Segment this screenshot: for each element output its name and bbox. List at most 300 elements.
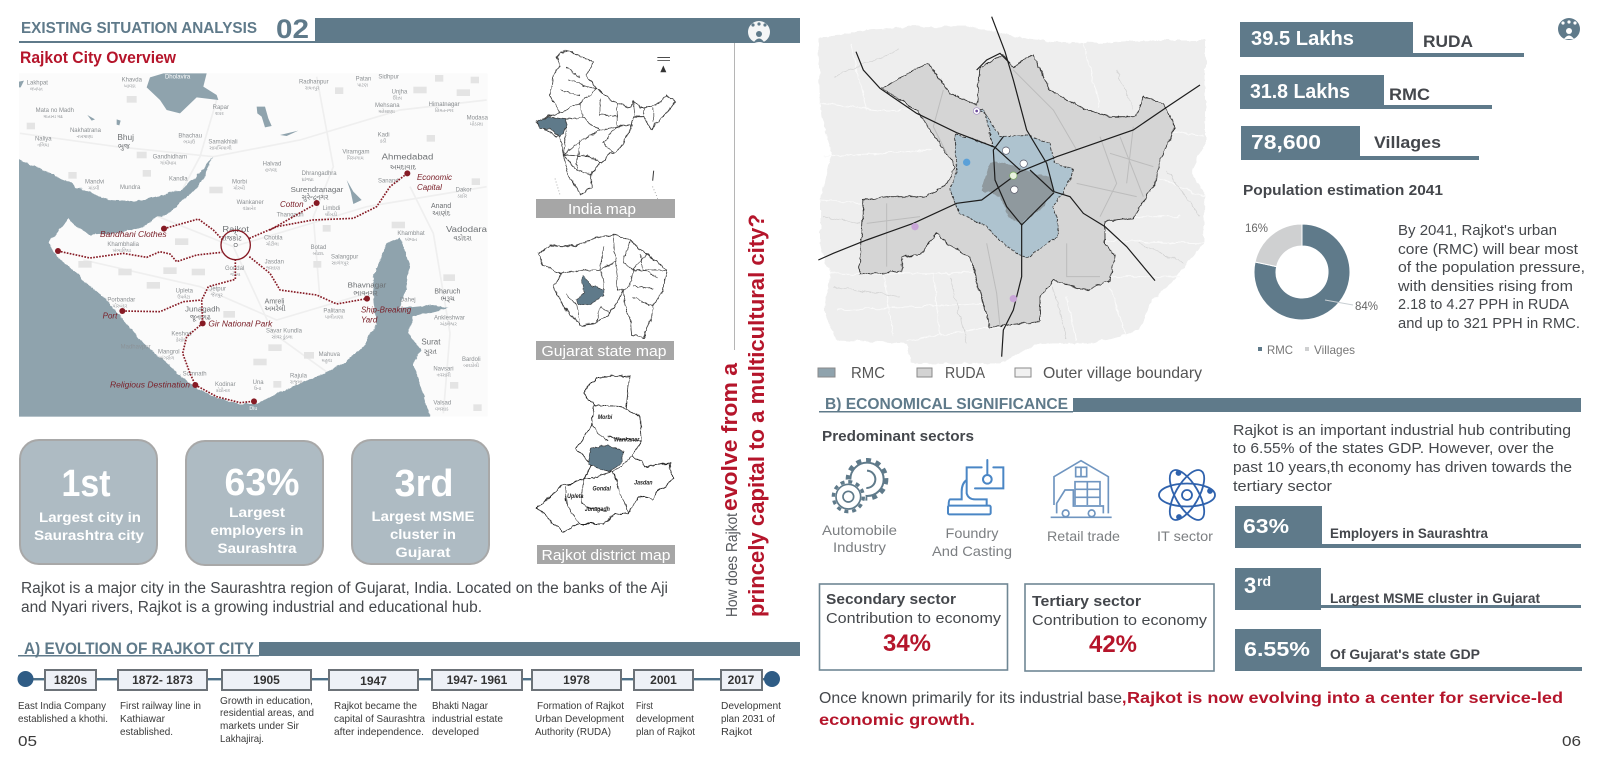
city labels: Kodinar xyxy=(215,382,236,388)
city labels: Somnath xyxy=(183,371,207,377)
map: RMC, RUDA and outer village boundary xyxy=(818,17,1205,363)
city labels: Dakor xyxy=(456,187,472,193)
city labels: નખત્રાણા xyxy=(77,134,93,140)
city labels xyxy=(27,74,489,413)
icon: warehouse truck xyxy=(1051,461,1112,517)
locator map: Gujarat xyxy=(538,234,667,337)
locator map: India xyxy=(537,51,675,200)
city labels: કડી xyxy=(380,137,387,144)
section heading: economical significance xyxy=(819,396,1581,413)
city labels: Rajkot xyxy=(222,225,250,234)
page 06: population and economy xyxy=(818,17,1585,750)
locator map: Rajkot district: Junagadh xyxy=(585,507,610,513)
city labels: ઉપલેટા xyxy=(177,294,191,301)
city labels: Khambhalia xyxy=(107,242,140,248)
city labels: Limbdi xyxy=(323,206,340,212)
callout: tertiary sector: 42% xyxy=(1089,631,1137,658)
milestone 1905: 1905 xyxy=(253,673,280,687)
stat row: 6.55% state GDP: Of Gujarat's state GDP xyxy=(1330,646,1480,662)
vertical question text xyxy=(717,214,769,617)
city labels: બોટાદ xyxy=(313,251,324,257)
sector: retail trade xyxy=(1047,461,1120,544)
route annotations: Religious Destination xyxy=(110,381,191,390)
city labels: Halvad xyxy=(263,161,281,167)
city labels: ખંભાત xyxy=(405,237,417,243)
city labels: Bardoli xyxy=(462,357,481,363)
sector: automobile industry: Industry xyxy=(833,539,886,555)
milestone 1947: 1947 xyxy=(360,674,387,688)
stat row: 3rd MSME cluster: Largest MSME cluster in Gujarat xyxy=(1330,590,1540,606)
city labels: Mangrol xyxy=(158,349,180,355)
stat bar: villages population: Villages xyxy=(1374,133,1441,152)
locator map: Rajkot district: Morbi xyxy=(598,415,613,421)
city labels: મહુવા xyxy=(322,358,333,364)
map legend: Outer village boundary xyxy=(1043,365,1202,382)
city labels: Surat xyxy=(421,338,441,347)
city labels: સાળંગપુર xyxy=(332,261,349,267)
city labels: Mandvi xyxy=(85,179,104,185)
city labels: Sanand xyxy=(378,179,399,185)
conclusion statement xyxy=(819,690,1563,729)
milestone 1905: markets under Sir xyxy=(220,720,299,732)
locator map: Rajkot district xyxy=(537,375,673,532)
stat bar: RUDA population: RUDA xyxy=(1423,32,1473,51)
city labels: Vadodara xyxy=(446,225,488,234)
stat row: 63% employers xyxy=(1235,506,1581,548)
stat bar: RMC population: 31.8 Lakhs xyxy=(1250,81,1350,103)
stat card: 1st: Largest city in xyxy=(39,510,141,525)
route annotations: Economic xyxy=(417,173,452,182)
city labels: Dhrangadhra xyxy=(302,171,337,177)
city labels: Ankleshwar xyxy=(434,315,465,321)
city labels: Himatnagar xyxy=(429,102,460,108)
sector: IT sector: IT sector xyxy=(1157,528,1213,544)
population paragraph: By 2041, Rajkot's urban xyxy=(1398,223,1557,239)
page header: 02 xyxy=(276,14,309,44)
city labels: Jasdan xyxy=(265,259,284,265)
milestone 1905 xyxy=(220,670,314,745)
stat bar: RUDA population xyxy=(1240,22,1524,57)
milestone 2001 xyxy=(634,670,695,738)
caption: India map: India map xyxy=(568,201,636,218)
city labels: સુરેન્દ્રનગર xyxy=(302,191,329,201)
city labels: રાધનપુર xyxy=(305,85,320,91)
sector: IT sector xyxy=(1157,465,1215,544)
conclusion statement: , xyxy=(1122,690,1126,707)
city labels: ખાવડા xyxy=(124,84,136,90)
city labels: જેતપુર xyxy=(211,292,223,299)
heading: population estimation 2041: Population estimation 2041 xyxy=(1243,182,1443,199)
locator map: Rajkot district: Upleta xyxy=(567,494,584,500)
city labels: Lakhpat xyxy=(27,81,48,87)
conclusion statement: economic growth. xyxy=(819,712,975,729)
route annotations: Capital xyxy=(417,183,442,192)
city labels: Khambhat xyxy=(397,231,425,237)
city labels: Upleta xyxy=(176,289,194,295)
stat card: 63% xyxy=(186,441,323,565)
city labels: ઉના xyxy=(254,385,262,392)
city labels: Bhavnagar xyxy=(348,283,387,290)
city labels: વાંકાનેર xyxy=(243,205,256,212)
city labels: Anand xyxy=(431,203,451,210)
city labels: Radhanpur xyxy=(299,79,329,85)
city labels: Junagadh xyxy=(185,307,220,314)
route annotations: Gir National Park xyxy=(208,320,273,329)
city labels: રાપર xyxy=(215,111,224,117)
city labels: લખપત xyxy=(30,87,43,93)
donut chart: population share xyxy=(1245,223,1378,357)
city labels: Samakhiali xyxy=(208,139,238,145)
timeline xyxy=(18,670,781,745)
Gulf of Kutch top water xyxy=(147,73,218,113)
page number 05: 05 xyxy=(18,733,37,750)
stat card: 1st xyxy=(20,440,157,564)
tourism and trade routes xyxy=(58,173,407,403)
city labels: Chotila xyxy=(264,235,283,241)
city labels: નવસારી xyxy=(437,372,451,379)
donut chart: population share: 16% xyxy=(1245,223,1268,235)
city labels: વિરમગામ xyxy=(347,154,364,161)
section heading: evolution of Rajkot city xyxy=(18,639,800,658)
city labels: Patan xyxy=(356,77,371,83)
sector: retail trade: Retail trade xyxy=(1047,528,1120,544)
city labels: Bharuch xyxy=(434,288,460,295)
stat card: 63%: Largest xyxy=(229,505,286,520)
milestone 1947-1961: Bhakti Nagar xyxy=(432,700,488,712)
milestone 1947: after independence. xyxy=(334,726,424,738)
city labels: Rapar xyxy=(213,105,229,111)
city labels: Thangadh xyxy=(277,213,304,219)
conclusion statement: Rajkot is now evolving into a center for service-led xyxy=(1127,690,1563,707)
population paragraph: of the population pressure, xyxy=(1398,260,1585,276)
city labels: માતાના મઢ xyxy=(43,114,63,120)
milestone 2001: development xyxy=(636,713,694,725)
sector: foundry and casting: And Casting xyxy=(932,543,1012,559)
map markers xyxy=(911,108,1027,302)
milestone 1905: Growth in education, xyxy=(220,695,313,707)
city labels: Porbandar xyxy=(107,298,135,304)
city labels: Valsad xyxy=(433,401,451,407)
city labels: Keshod xyxy=(171,332,192,338)
stat row: 3rd MSME cluster xyxy=(1235,568,1581,610)
milestone 1947-1961: industrial estate xyxy=(432,713,503,725)
scale bar and north arrow xyxy=(657,58,670,72)
city labels: Surendranagar xyxy=(291,187,344,194)
section heading: economical significance: B) ECONOMICAL SIGNIFICANCE xyxy=(825,396,1068,413)
milestone 1872-1873: Kathiawar xyxy=(120,713,165,725)
city labels: વડોદરા xyxy=(453,234,472,243)
city labels: હિંમતનગર xyxy=(435,107,454,114)
city labels: Dahej xyxy=(400,298,416,304)
donut chart: population share: 84% xyxy=(1355,301,1378,313)
map legend: RMC xyxy=(851,365,885,382)
stat card: 3rd: Gujarat xyxy=(396,545,451,560)
intro paragraph: and Nyari rivers, Rajkot is a growing industrial and educational hub. xyxy=(21,599,482,616)
locator map: Rajkot district: Jasdan xyxy=(634,480,653,487)
economy paragraph: to 6.55% of the states GDP. However, over the xyxy=(1233,440,1554,457)
city labels: Amreli xyxy=(265,299,285,306)
vertical question text: How does Rajkot xyxy=(724,513,741,617)
milestone 1978: Authority (RUDA) xyxy=(535,726,611,738)
milestone 1905: residential areas, and xyxy=(220,707,314,719)
city labels: માંગરોળ xyxy=(159,355,174,361)
city labels: પાટણ xyxy=(357,83,369,89)
vertical question text: princely capital to a multicultural city? xyxy=(744,214,769,617)
caption: Rajkot district map: Rajkot district map xyxy=(542,547,670,564)
city labels: Salangpur xyxy=(331,255,358,261)
city labels: અમરેલી xyxy=(265,303,286,313)
city labels: કેશોદ xyxy=(176,337,186,344)
city labels: Palitana xyxy=(323,308,346,314)
city labels: Navsari xyxy=(433,367,454,373)
stat card: 3rd xyxy=(352,440,489,564)
callout: secondary sector: Contribution to economy xyxy=(826,610,1002,627)
milestone 1820s: 1820s xyxy=(54,673,88,687)
milestone 1947: capital of Saurashtra xyxy=(334,713,425,725)
city labels: Mahuva xyxy=(319,352,341,358)
stat card: 63%: employers in xyxy=(210,523,304,538)
milestone 1820s xyxy=(18,670,108,725)
map legend xyxy=(818,365,1202,382)
city labels: સુરત xyxy=(424,347,437,356)
city labels: ડાકોર xyxy=(457,193,468,199)
stat row: 3rd MSME cluster: rd xyxy=(1257,573,1271,589)
milestone 1872-1873: established. xyxy=(120,726,173,738)
city labels: ઊંઝા xyxy=(393,94,403,101)
milestone 2017: Rajkot xyxy=(721,726,752,738)
milestone 1978: Urban Development xyxy=(535,713,624,725)
economy paragraph: tertiary sector xyxy=(1233,478,1332,495)
city labels: હળવદ xyxy=(265,167,278,173)
icon: atom xyxy=(1159,465,1215,525)
city labels: આણંદ xyxy=(432,208,451,217)
city labels: જસદણ xyxy=(266,265,281,271)
city labels: રાજકોટ xyxy=(221,234,242,243)
milestone 2017 xyxy=(721,670,781,738)
stat card: 63%: 63% xyxy=(224,462,300,504)
icon: gears xyxy=(831,460,886,514)
stat card: 3rd: 3rd xyxy=(394,463,454,505)
city labels: Mehsana xyxy=(375,103,400,109)
city labels: રાજુલા xyxy=(290,379,303,385)
city labels: Bhuj xyxy=(117,133,134,142)
economy paragraph xyxy=(1233,422,1572,495)
divider line xyxy=(734,43,735,350)
locator map: Rajkot district: Wankaner xyxy=(614,437,640,444)
milestone 2017: Development xyxy=(721,700,781,712)
milestone 1978: Formation of Rajkot xyxy=(537,700,624,712)
city labels: બારડોલી xyxy=(463,363,479,369)
milestone 2001: plan of Rajkot xyxy=(636,726,695,738)
milestone 1978: 1978 xyxy=(563,673,590,687)
stat row: 63% employers: Employers in Saurashtra xyxy=(1330,525,1488,541)
city labels: Savar Kundla xyxy=(266,328,303,334)
section heading: evolution of Rajkot city: A) EVOLTION OF RAJKOT CITY xyxy=(24,639,255,658)
city labels: Viramgam xyxy=(342,149,370,155)
milestone 1820s: established a khothi. xyxy=(18,713,108,725)
sector: automobile industry xyxy=(822,460,897,555)
route annotations: Ship-Breaking xyxy=(361,306,412,315)
map: Saurashtra region with routes xyxy=(0,73,500,427)
city labels: ખંભાળિયા xyxy=(113,247,132,254)
city labels: Sidhpur xyxy=(378,74,399,80)
route annotations xyxy=(100,173,452,390)
city labels: માંડવી xyxy=(88,185,100,191)
route annotations: Port xyxy=(103,311,118,320)
conclusion statement: Once known primarily for its industrial base xyxy=(819,690,1122,707)
callout: tertiary sector: Tertiary sector xyxy=(1032,594,1141,610)
population paragraph: and up to 321 PPH in RMC. xyxy=(1398,316,1580,332)
city labels: Mata no Madh xyxy=(36,108,74,114)
city labels: ભચાઉ xyxy=(183,138,195,145)
city labels: ગાંધીધામ xyxy=(160,160,176,166)
city labels: સાવર કુંડલા xyxy=(272,333,293,340)
city labels: Gondal xyxy=(225,266,244,272)
city labels: Khavda xyxy=(122,78,143,84)
milestone 1947-1961: 1947- 1961 xyxy=(447,673,508,687)
caption: Gujarat state map: Gujarat state map xyxy=(542,343,666,360)
vertical question text: evolve from a xyxy=(717,362,742,511)
city labels: Kandla xyxy=(169,176,188,182)
icon: foundry xyxy=(948,460,1003,514)
milestone 1820s: East India Company xyxy=(18,700,107,712)
milestone 2017: 2017 xyxy=(728,673,755,687)
stat row: 6.55% state GDP xyxy=(1235,629,1582,671)
route annotations: Yard xyxy=(361,315,378,324)
route annotations: Cotton xyxy=(280,200,304,209)
city labels: Morbi xyxy=(232,180,247,186)
sector: foundry and casting xyxy=(932,460,1012,559)
milestone 1947-1961 xyxy=(432,670,522,738)
milestone 2017: plan 2031 of xyxy=(721,713,775,725)
city labels: લીંબડી xyxy=(325,211,338,218)
stat bar: RMC population xyxy=(1240,75,1492,109)
intro paragraph: Rajkot is a major city in the Saurashtra region of Gujarat, India. Located on the banks of the Aji xyxy=(21,580,668,597)
route annotations: Bandhani Clothes xyxy=(100,230,167,239)
callout: tertiary sector xyxy=(1025,584,1214,671)
callout: tertiary sector: Contribution to economy xyxy=(1032,612,1208,629)
intro paragraph xyxy=(21,580,668,616)
milestone 1872-1873: 1872- 1873 xyxy=(132,673,193,687)
stat bar: villages population xyxy=(1241,126,1479,160)
milestone 2001: 2001 xyxy=(650,673,677,687)
city labels: ભુજ xyxy=(118,141,131,150)
page 05: existing situation analysis xyxy=(0,14,800,750)
stat row: 3rd MSME cluster: 3 xyxy=(1244,573,1256,598)
milestone 1947: Rajkot became the xyxy=(334,700,417,712)
city labels: Jetpur xyxy=(209,287,226,293)
population paragraph: core (RMC) will bear most xyxy=(1398,242,1578,258)
stat card: 1st: 1st xyxy=(62,463,111,505)
milestone 1947 xyxy=(329,670,425,738)
city labels: Unjha xyxy=(392,89,408,95)
city labels: Botad xyxy=(311,245,326,251)
map legend: RUDA xyxy=(945,365,985,382)
donut chart: population share: Villages xyxy=(1314,343,1355,357)
major roads xyxy=(818,17,1200,357)
stat card: 3rd: cluster in xyxy=(390,527,456,542)
city labels: Ahmedabad xyxy=(382,153,433,162)
city labels: Madhavpur xyxy=(121,344,151,350)
stat bar: RMC population: RMC xyxy=(1389,85,1430,104)
city labels: ચોટીલા xyxy=(266,240,279,247)
city labels: ધ્રાંગધ્રા xyxy=(302,177,314,183)
stat row: 6.55% state GDP: 6.55% xyxy=(1244,639,1310,661)
city labels: Rajula xyxy=(290,373,308,379)
milestone 1872-1873: First railway line in xyxy=(120,700,201,712)
icon: people emblem (right page) xyxy=(1558,18,1580,40)
milestone 2001: First xyxy=(636,700,653,712)
stat bar: villages population: 78,600 xyxy=(1251,132,1321,154)
city labels: Gandhidham xyxy=(153,154,187,160)
Arabian Sea and gulfs xyxy=(13,157,448,423)
heading: predominant sectors: Predominant sectors xyxy=(822,429,974,445)
stat card: 3rd: Largest MSME xyxy=(372,509,474,524)
page header: EXISTING SITUATION ANALYSIS xyxy=(21,20,257,37)
city labels: ભરૂચ xyxy=(441,294,455,303)
city labels: Diu xyxy=(249,406,257,412)
city labels: અમદાવાદ xyxy=(390,162,416,171)
city labels: મોરબી xyxy=(233,186,245,192)
city labels: જૂનાગઢ xyxy=(190,312,211,321)
icon: people emblem (header) xyxy=(748,21,770,43)
caption: India map xyxy=(536,199,675,218)
donut chart: population share: RMC xyxy=(1267,343,1293,357)
milestone 1978 xyxy=(532,670,624,738)
economy paragraph: past 10 years,th economy has driven towards the xyxy=(1233,459,1572,476)
city labels: Bhachau xyxy=(178,133,202,139)
city labels: કોડીનાર xyxy=(216,387,231,394)
locator map: Rajkot district: Gondal xyxy=(592,486,611,493)
city labels: નલિયા xyxy=(37,142,50,149)
city labels: Nakhatrana xyxy=(70,128,102,134)
city labels: Mundra xyxy=(120,185,141,191)
milestone 1905: Lakhajiraj. xyxy=(220,733,264,745)
callout: secondary sector xyxy=(820,584,1008,670)
stat card: 1st: Saurashtra city xyxy=(34,528,145,543)
city labels: Naliya xyxy=(35,137,52,143)
sector: foundry and casting: Foundry xyxy=(946,525,998,541)
stat row: 63% employers: 63% xyxy=(1243,516,1289,538)
stat bar: RUDA population: 39.5 Lakhs xyxy=(1251,28,1354,50)
city labels: Dholavira xyxy=(165,74,191,80)
stat card: 63%: Saurashtra xyxy=(218,541,297,556)
city labels: Wankaner xyxy=(237,200,264,206)
milestone 1947-1961: developed xyxy=(432,726,479,738)
page header xyxy=(19,14,800,44)
city labels: Una xyxy=(253,380,264,386)
city labels: ભાવનગર xyxy=(353,288,378,297)
sector: automobile industry: Automobile xyxy=(822,522,897,538)
city labels: Kadi xyxy=(378,132,390,138)
city labels: સામખિયાળી xyxy=(209,144,232,151)
page number 06: 06 xyxy=(1562,733,1581,750)
city labels: મહેસાણા xyxy=(378,108,395,115)
city labels: અંકલેશ્વર xyxy=(440,320,457,327)
city labels: Modasa xyxy=(467,116,489,122)
callout: secondary sector: Secondary sector xyxy=(826,592,956,608)
city labels: વલસાડ xyxy=(435,407,449,413)
city labels: પોરબંદર xyxy=(113,304,128,310)
population paragraph: 2.18 to 4.27 PPH in RUDA xyxy=(1398,297,1569,313)
economy paragraph: Rajkot is an important industrial hub contributing xyxy=(1233,422,1571,439)
milestone 1872-1873 xyxy=(118,670,207,738)
population paragraph: with densities rising from xyxy=(1397,279,1573,295)
city labels: મોડાસા xyxy=(470,122,484,128)
callout: secondary sector: 34% xyxy=(883,630,931,657)
population paragraph xyxy=(1397,223,1585,332)
heading: Rajkot City Overview: Rajkot City Overview xyxy=(20,49,176,67)
